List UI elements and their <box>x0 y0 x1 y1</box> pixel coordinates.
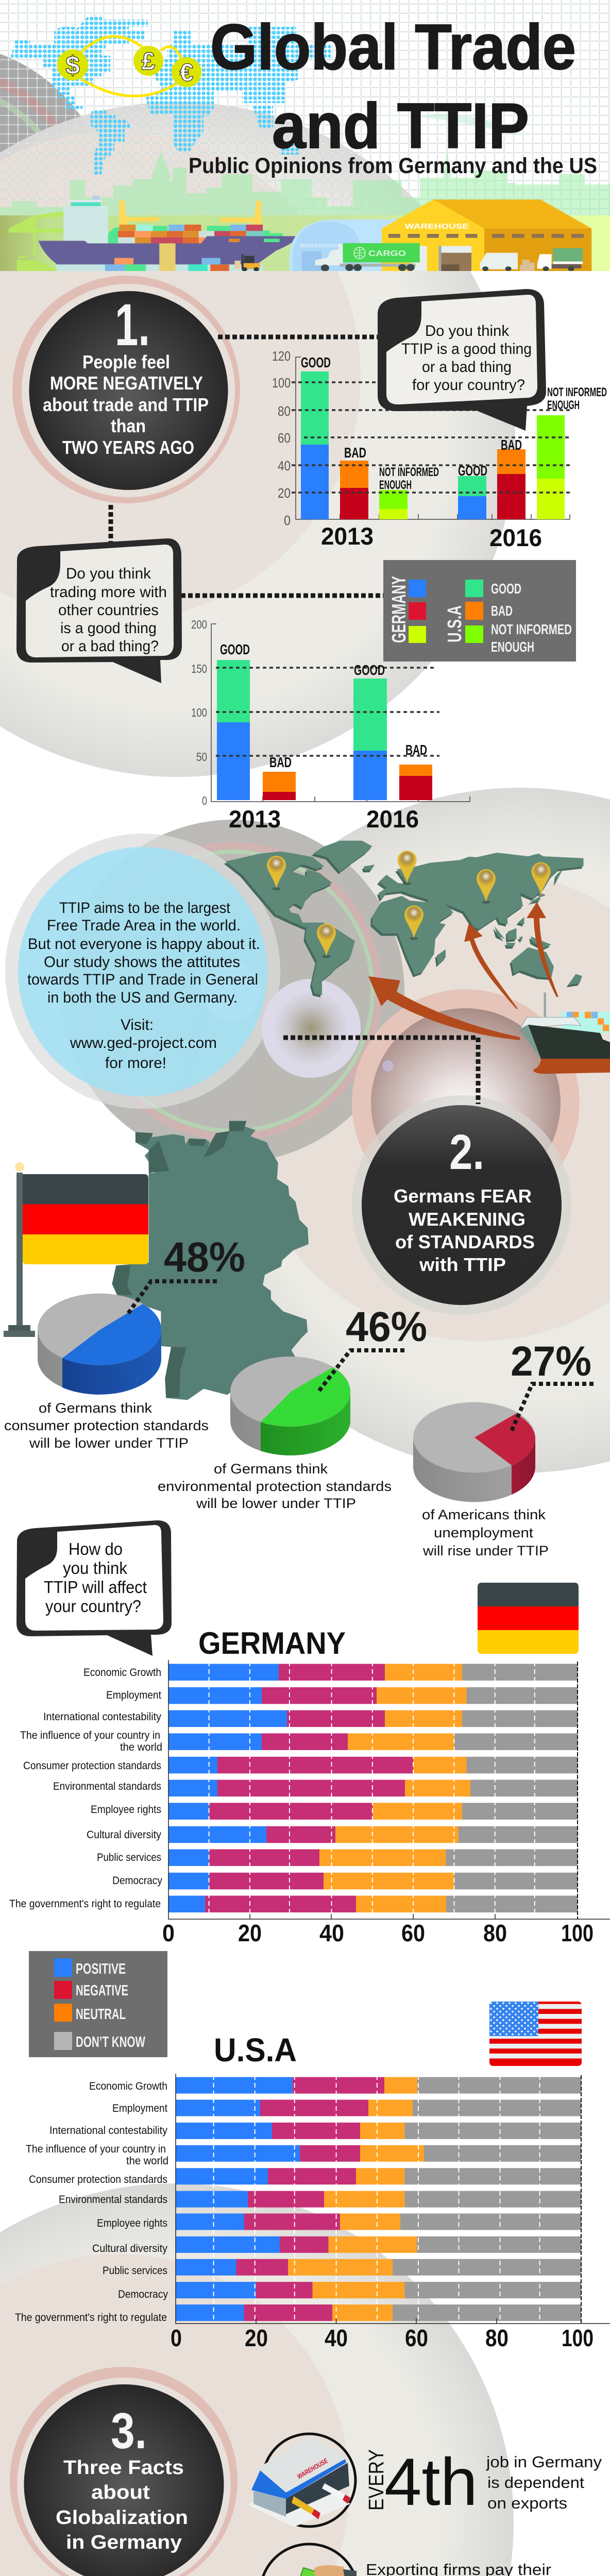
panel: info text <box>27 900 260 1072</box>
title: Global Trade <box>210 12 576 83</box>
flag: Germany <box>478 1583 579 1654</box>
bar chart: TTIP good or bad: GOOD <box>458 463 487 479</box>
legend: positive negative neutral: POSITIVE <box>76 1961 126 1977</box>
stacked bar chart: USA: 0 <box>171 2325 182 2351</box>
panel: info text: for more! <box>105 1055 166 1072</box>
icon: currency exchange: £ <box>142 48 156 75</box>
legend: good bad not informed <box>383 560 576 662</box>
stacked bar chart: USA: Public services <box>103 2265 167 2277</box>
stacked bar chart: Germany: Environmental standards <box>53 1781 161 1792</box>
bar chart: TTIP good or bad: 100 <box>272 375 291 391</box>
bar chart: TTIP good or bad: BAD <box>501 437 522 453</box>
bar chart: trading good or bad: GOOD <box>220 641 250 657</box>
legend: positive negative neutral: NEGATIVE <box>76 1982 128 1999</box>
speech bubble: affect question: How do <box>69 1539 123 1558</box>
speech bubble: TTIP question <box>378 289 546 431</box>
bar chart: TTIP good or bad: 0 <box>284 513 291 528</box>
bar chart: TTIP good or bad: GOOD <box>301 354 331 370</box>
legend: good bad not informed: NOT INFORMED <box>491 621 572 637</box>
stacked bar chart: USA: 20 <box>245 2325 268 2351</box>
icon: currency exchange: $ <box>65 51 80 80</box>
panel: section 3 badge: 3. <box>111 2402 147 2459</box>
legend: good bad not informed: GERMANY <box>388 576 410 643</box>
dotted connector section 2 <box>283 1038 478 1104</box>
panel: info text: TTIP aims to be the largest <box>59 900 231 917</box>
stacked bar chart: Germany: 80 <box>483 1920 507 1946</box>
pie: 48 percent: will be lower under TTIP <box>29 1435 189 1451</box>
panel: section 3 badge: Globalization <box>56 2507 188 2529</box>
stacked bar chart: Germany: International contestability <box>43 1711 161 1723</box>
bar chart: TTIP good or bad <box>272 348 607 551</box>
bar chart: trading good or bad: 2013 <box>229 805 281 833</box>
stacked bar chart: Germany: Democracy <box>112 1875 162 1887</box>
panel: section 2 badge: with TTIP <box>419 1254 506 1275</box>
stacked bar chart: Germany: Public services <box>97 1852 161 1863</box>
stacked bar chart: Germany: Consumer protection standards <box>23 1760 161 1772</box>
stacked bar chart: USA: 100 <box>562 2325 594 2351</box>
stacked bar chart: Germany <box>9 1660 610 1946</box>
fact: every 4th job: 4th <box>384 2444 478 2519</box>
stacked bar chart: USA: International contestability <box>49 2125 167 2137</box>
bar chart: trading good or bad: 150 <box>191 662 207 675</box>
icon: currency exchange: € <box>180 59 193 87</box>
bar chart: trading good or bad: 50 <box>196 750 207 764</box>
panel: info text: in both the US and Germany. <box>47 989 238 1006</box>
ground <box>0 215 610 271</box>
bar chart: TTIP good or bad: 2016 <box>489 524 542 551</box>
fact: every 4th job: is dependent <box>487 2473 584 2492</box>
pie: 48 percent: consumer protection standards <box>4 1418 209 1433</box>
cargo ship <box>9 196 301 272</box>
bar chart: trading good or bad <box>191 618 470 833</box>
stacked bar chart: Germany: The influence of your country in <box>20 1730 160 1741</box>
speech bubble: TTIP question: TTIP is a good thing <box>401 341 532 358</box>
pie: 48 percent: of Germans think <box>39 1400 152 1416</box>
stacked bar chart: Germany: Economic Growth <box>83 1667 161 1679</box>
icon: warehouse: WAREHOUSE <box>296 2456 329 2481</box>
pie: 46 percent: environmental protection standards <box>158 1479 392 1494</box>
bar chart: trading good or bad: 200 <box>191 618 207 631</box>
speech bubble: trading question <box>16 538 182 683</box>
panel: section 3 badge: Three Facts <box>63 2457 184 2479</box>
cargo label: CARGO <box>368 249 406 258</box>
bar chart: TTIP good or bad: 80 <box>278 403 291 419</box>
pie: 48 percent: 48% <box>164 1234 245 1281</box>
bar chart: trading good or bad: GOOD <box>354 662 385 678</box>
stacked bar chart: Germany: Employee rights <box>91 1804 161 1816</box>
world map <box>224 841 583 997</box>
panel: section 2 badge: Germans FEAR <box>394 1185 532 1207</box>
icon: map pins <box>267 851 550 958</box>
speech bubble: TTIP question: for your country? <box>412 377 525 394</box>
speech bubble: affect question: TTIP will affect <box>44 1578 147 1597</box>
panel: section 3 badge <box>10 2367 238 2576</box>
stacked bar chart: Germany: 20 <box>238 1920 262 1946</box>
bar chart: TTIP good or bad: 20 <box>278 485 291 501</box>
fact: every 4th job: job in Germany <box>486 2453 602 2471</box>
panel: info text: But not everyone is happy about it. <box>28 936 260 953</box>
pie: 27 percent: will rise under TTIP <box>422 1543 549 1558</box>
icon: money exchange <box>260 2544 358 2576</box>
plane <box>421 114 521 135</box>
pie: 46 percent: 46% <box>346 1303 427 1350</box>
speech bubble: trading question: or a bad thing? <box>61 638 159 655</box>
German flag on pole <box>4 1162 148 1337</box>
stacked bar chart: USA: Employment <box>112 2103 167 2114</box>
stacked bar chart: Germany: Cultural diversity <box>87 1829 161 1841</box>
panel: section 1 badge: than <box>111 415 146 436</box>
fact: every 4th job <box>364 2444 602 2519</box>
stacked bar chart: USA: the world <box>126 2155 168 2167</box>
pie: 48 percent <box>4 1234 245 1451</box>
panel: section 1 badge: TWO YEARS AGO <box>62 437 194 458</box>
skyline <box>0 151 610 219</box>
pie: 27 percent: of Americans think <box>422 1507 546 1522</box>
stacked bar chart: USA <box>15 2074 610 2351</box>
fact: every 4th job: EVERY <box>364 2449 388 2511</box>
speech bubble: trading question: Do you think <box>66 565 151 582</box>
bar chart: trading good or bad: 0 <box>202 794 207 807</box>
speech bubble: affect question: you think <box>63 1558 127 1578</box>
stacked bar chart: USA: 40 <box>325 2325 348 2351</box>
stacked bar chart: Germany: 0 <box>162 1920 175 1946</box>
legend: good bad not informed: BAD <box>491 603 513 619</box>
warehouse and trucks <box>290 199 591 272</box>
legend: good bad not informed: U.S.A <box>444 605 466 642</box>
stacked bar chart: Germany: Employment <box>106 1689 161 1701</box>
icon: warehouse <box>247 2434 355 2527</box>
header scene <box>0 0 610 272</box>
stacked bar chart: Germany: 100 <box>561 1920 594 1946</box>
panel: info text: Visit: <box>121 1016 154 1033</box>
panel: section 2 badge: 2. <box>449 1125 484 1180</box>
speech bubble: TTIP question: Do you think <box>425 323 510 340</box>
bar chart: TTIP good or bad: 60 <box>278 430 291 446</box>
stacked bar chart: Germany: The government's right to regulate <box>9 1898 161 1910</box>
panel: section 3 badge: in Germany <box>66 2532 182 2553</box>
pie: 27 percent: 27% <box>511 1338 591 1385</box>
stacked bar chart: USA: The government's right to regulate <box>15 2312 167 2324</box>
faded warehouse label: WAREHOUSE <box>299 243 342 249</box>
warehouse label: WAREHOUSE <box>405 222 469 231</box>
pie: 46 percent <box>158 1303 427 1511</box>
panel: section 2 badge: of STANDARDS <box>395 1231 535 1252</box>
heading: USA: U.S.A <box>214 2031 297 2069</box>
stacked bar chart: Germany: 60 <box>401 1920 425 1946</box>
fact: every 4th job: on exports <box>487 2494 567 2512</box>
bar chart: TTIP good or bad: 120 <box>272 348 291 364</box>
icon: currency exchange <box>57 37 201 96</box>
bar chart: TTIP good or bad: 40 <box>278 458 291 473</box>
pie: 27 percent <box>413 1338 594 1558</box>
legend: positive negative neutral <box>29 1951 167 2057</box>
panel: section 1 badge: 1. <box>115 292 150 358</box>
legend: positive negative neutral: NEUTRAL <box>76 2006 126 2023</box>
stacked bar chart: Germany: the world <box>120 1741 162 1753</box>
bar chart: TTIP good or bad: 2013 <box>321 522 374 550</box>
bar chart: trading good or bad: BAD <box>405 742 427 758</box>
speech bubble: trading question: trading more with <box>50 584 167 601</box>
container ship bow <box>519 992 610 1074</box>
arrows <box>368 902 558 1040</box>
speech bubble: affect question <box>16 1520 172 1656</box>
panel: section 1 badge: People feel <box>82 351 170 372</box>
stacked bar chart: USA: Consumer protection standards <box>29 2174 167 2185</box>
panel: info text: Free Trade Area in the world. <box>47 917 241 934</box>
stacked bar chart: USA: 60 <box>405 2325 428 2351</box>
panel: section 1 badge <box>12 276 240 503</box>
stacked bar chart: USA: The influence of your country in <box>26 2143 166 2155</box>
dotted world map <box>10 15 331 175</box>
panel: section 1 badge: MORE NEGATIVELY <box>50 372 203 394</box>
bar chart: TTIP good or bad: ENOUGH <box>547 398 580 412</box>
cargo label <box>354 247 406 259</box>
stacked bar chart: USA: 80 <box>485 2325 509 2351</box>
panel: info text: Our study shows the attitutes <box>44 954 240 971</box>
bar chart: TTIP good or bad: BAD <box>344 445 366 461</box>
stacked bar chart: USA: Economic Growth <box>89 2080 167 2092</box>
bar chart: TTIP good or bad: ENOUGH <box>379 478 412 492</box>
title <box>189 12 597 178</box>
pie: 27 percent: unemployment <box>434 1525 534 1540</box>
panel: section 1 badge: about trade and TTIP <box>43 394 209 415</box>
panel: section 2 badge <box>352 989 580 1315</box>
panel: section 3 badge: about <box>91 2482 150 2503</box>
legend: good bad not informed: ENOUGH <box>491 639 534 655</box>
speech bubble: TTIP question: or a bad thing <box>422 359 512 376</box>
panel: section 2 badge: WEAKENING <box>409 1209 526 1230</box>
pie: 46 percent: will be lower under TTIP <box>196 1496 356 1511</box>
speech bubble: affect question: your country? <box>45 1597 141 1616</box>
title: and TTIP <box>272 91 529 162</box>
stacked bar chart: USA: Environmental standards <box>59 2194 167 2206</box>
legend: good bad not informed: GOOD <box>491 581 521 597</box>
dotted connectors section 1 <box>111 337 384 596</box>
flag: USA <box>489 2002 582 2066</box>
pie: 46 percent: of Germans think <box>214 1461 328 1477</box>
stacked bar chart: USA: Cultural diversity <box>92 2243 167 2255</box>
panel: info text: www.ged-project.com <box>70 1035 217 1052</box>
bar chart: trading good or bad: BAD <box>269 754 292 770</box>
Germany map <box>112 1121 309 1400</box>
speech bubble: trading question: is a good thing <box>60 620 157 637</box>
legend: positive negative neutral: DON’T KNOW <box>76 2034 145 2050</box>
bar chart: TTIP good or bad: NOT INFORMED <box>379 465 439 479</box>
heading: Germany: GERMANY <box>198 1626 346 1660</box>
stacked bar chart: USA: Employee rights <box>97 2217 167 2229</box>
panel: info text: towards TTIP and Trade in General <box>27 971 258 988</box>
speech bubble: trading question: other countries <box>58 602 159 619</box>
stacked bar chart: Germany: 40 <box>319 1920 344 1946</box>
bar chart: trading good or bad: 2016 <box>366 805 419 833</box>
background grid <box>0 0 610 217</box>
stacked bar chart: USA: Democracy <box>118 2289 168 2300</box>
bar chart: trading good or bad: 100 <box>191 706 207 719</box>
